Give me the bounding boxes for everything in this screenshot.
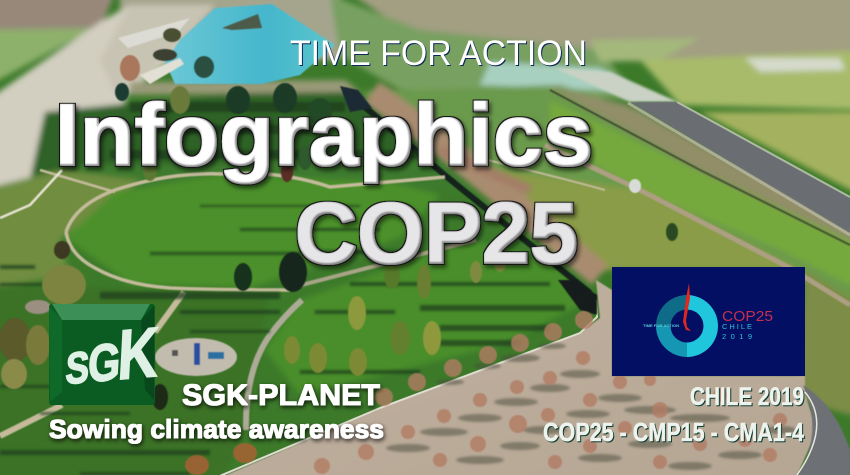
event label: COP25 - CMP15 - CMA1-4: COP25 - CMP15 - CMA1-4 (543, 417, 804, 447)
lake (165, 4, 335, 84)
top fields (0, 0, 850, 70)
bright road strip (555, 68, 678, 102)
COP25 Chile logo panel (612, 267, 805, 376)
logo text (643, 308, 773, 341)
logo text: COP25 (722, 308, 773, 325)
SGK logo cube (49, 304, 160, 405)
lower lawn (265, 240, 590, 395)
plaza tree shadows (386, 343, 796, 470)
dirt path right (545, 145, 850, 305)
subtitle: TIME FOR ACTION: TIME FOR ACTION (290, 34, 587, 73)
lake banks and island (115, 14, 262, 101)
main lawn (66, 175, 440, 288)
park paths (0, 157, 605, 436)
left olive lawn (0, 170, 140, 290)
icon: Chile map (683, 283, 691, 331)
logo text: 2019 (722, 332, 752, 341)
grey road (630, 102, 850, 233)
playground (155, 338, 237, 376)
logo text: CHILE (722, 322, 752, 331)
tagline: Sowing climate awareness (49, 414, 384, 444)
dark canal (345, 90, 590, 293)
right meadows (360, 85, 850, 310)
pale road top left (0, 5, 195, 205)
dark field line (550, 90, 850, 245)
pink trees (185, 311, 787, 475)
curved road (795, 385, 850, 475)
logo text: TIME FOR ACTION (643, 323, 679, 328)
pink tree strip (372, 92, 600, 275)
title: COP25: COP25 (295, 186, 578, 282)
band below lake (30, 82, 470, 185)
plaza (215, 280, 817, 475)
logo ring (656, 295, 718, 357)
logo text: SGK: G (87, 333, 122, 394)
trees (0, 83, 678, 410)
event label: CHILE 2019: CHILE 2019 (690, 383, 804, 411)
logo text: SGK: K (116, 312, 160, 395)
lawn shadows (0, 102, 565, 475)
plaza edge (215, 300, 597, 475)
title: Infographics: Infographics (55, 87, 593, 184)
logo text: SGK: S (64, 343, 90, 394)
brand name: SGK-PLANET: SGK-PLANET (182, 379, 380, 412)
